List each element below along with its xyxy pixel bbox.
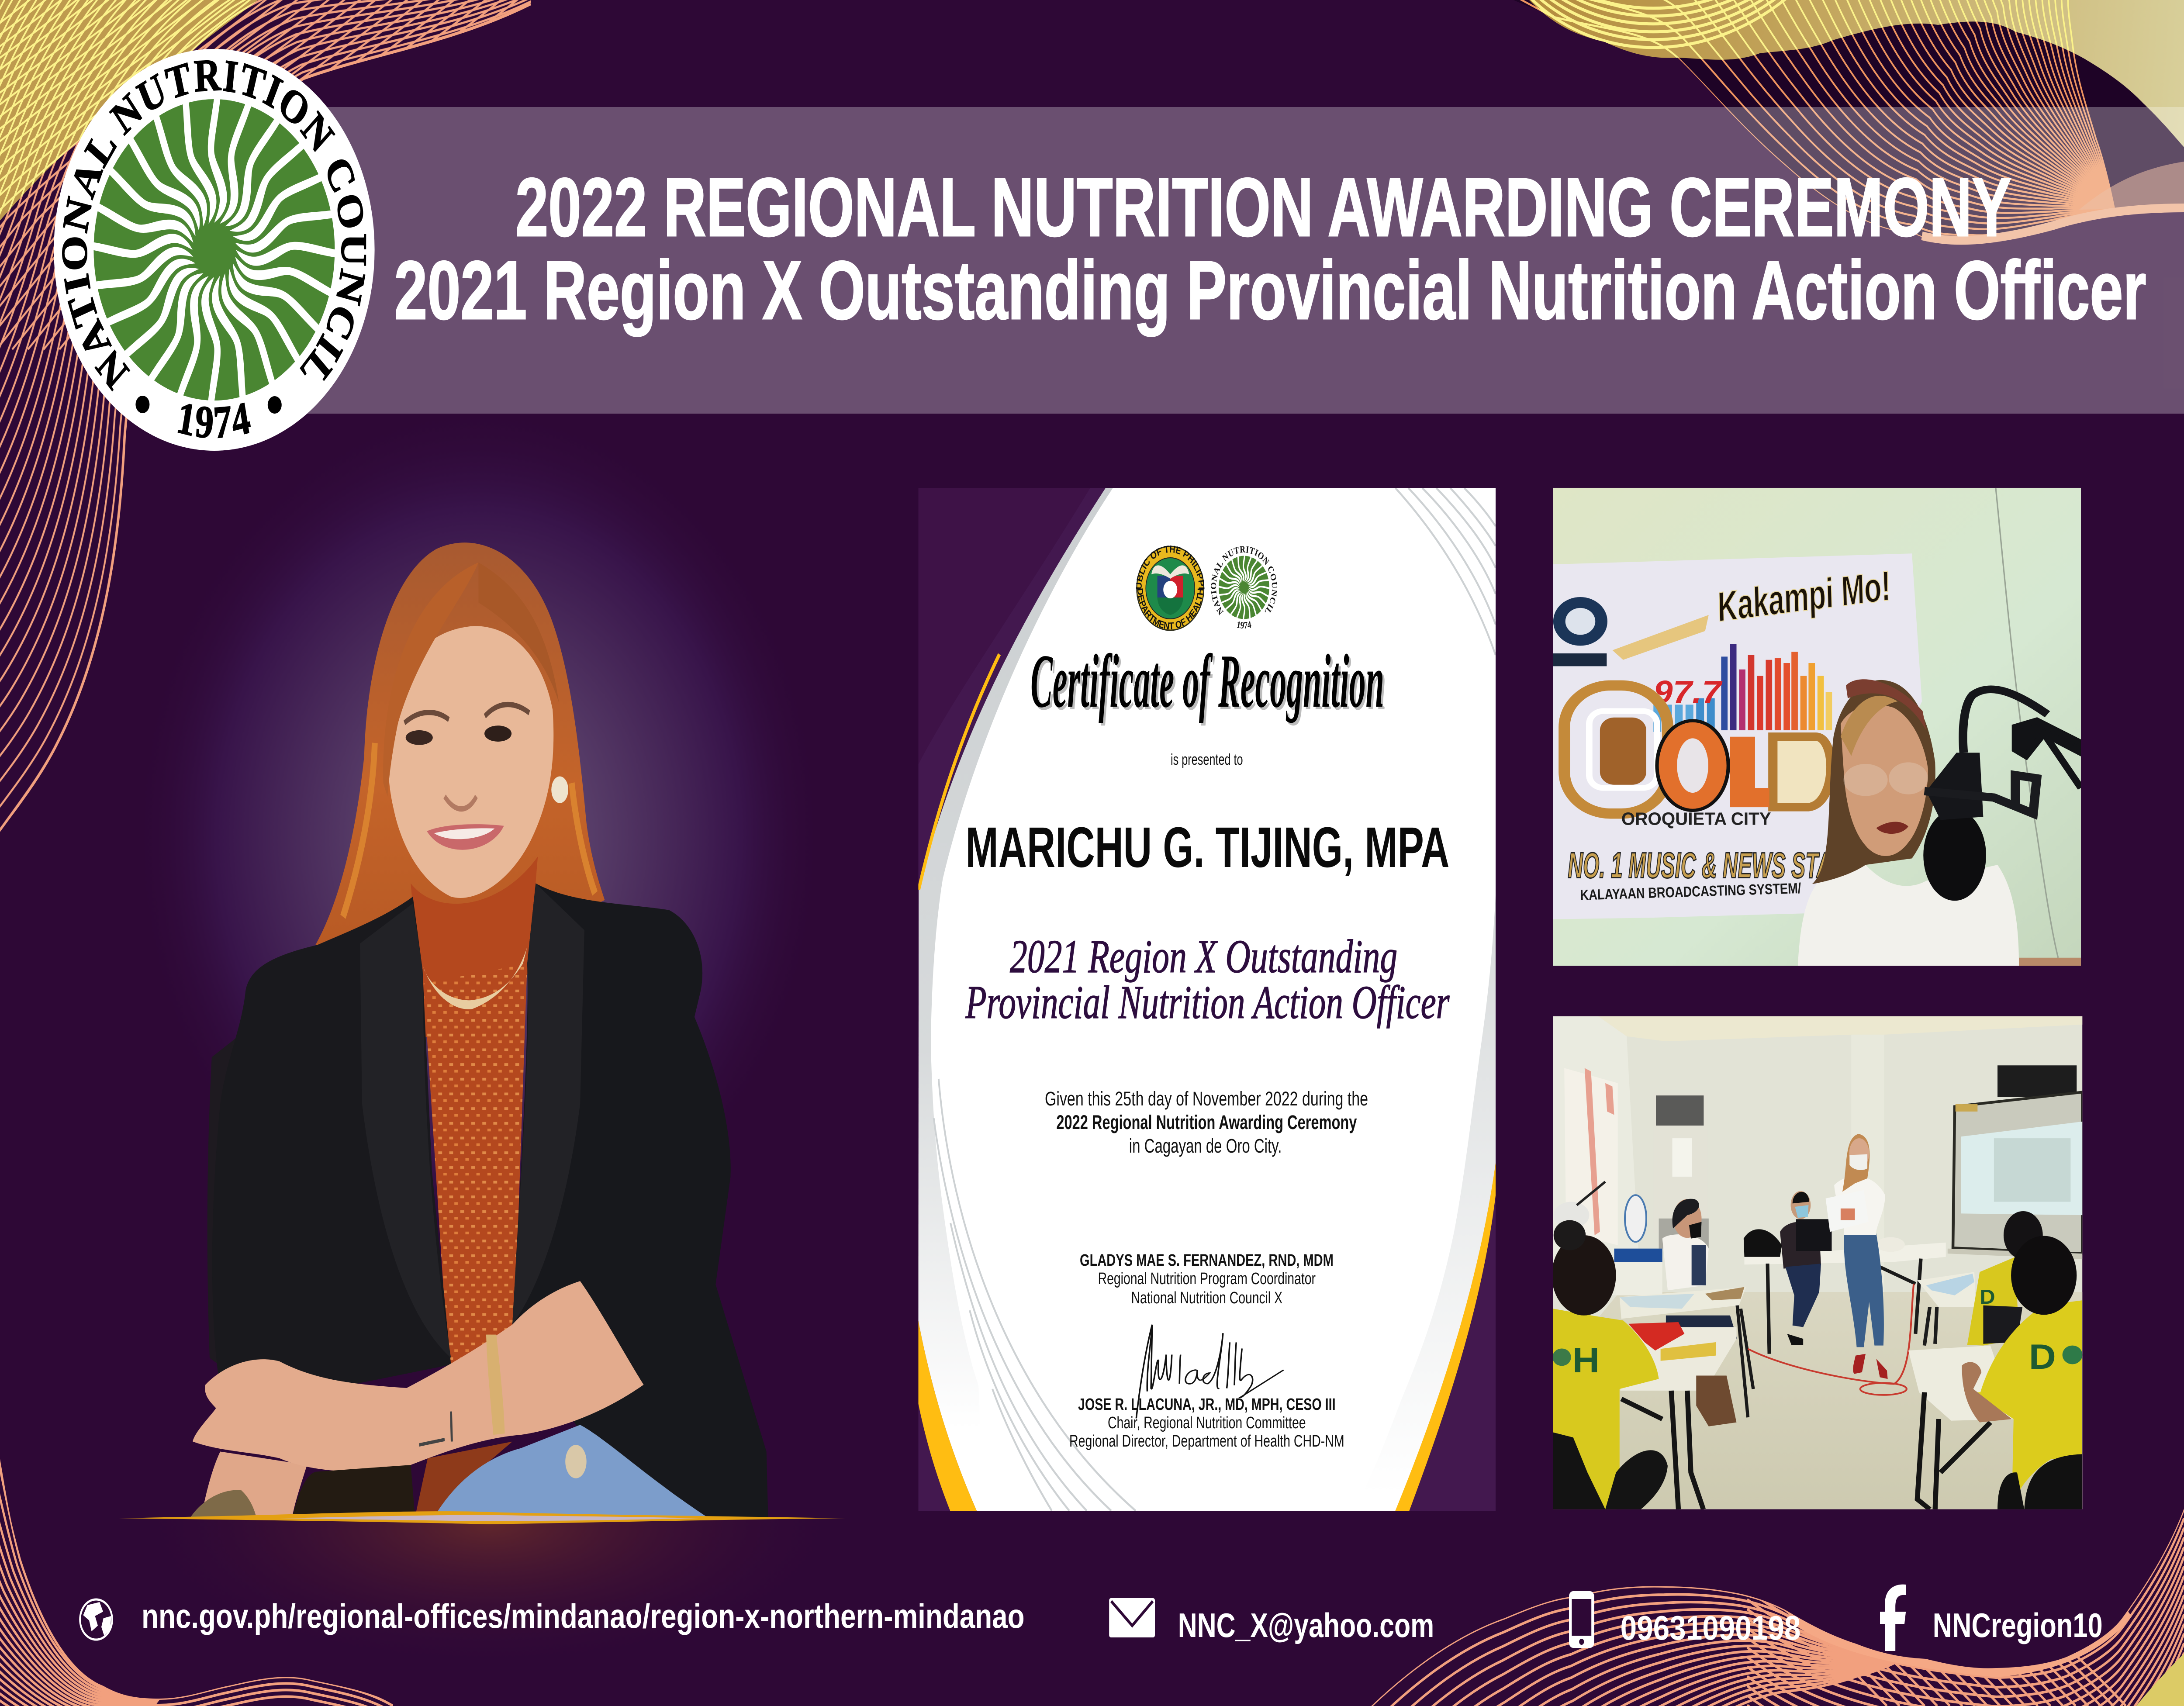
photo: radio studio interview: [1553, 488, 2081, 966]
certificate: first signatory: National Nutrition Council X: [1131, 1289, 1282, 1307]
certificate: first signatory: Regional Nutrition Program Coordinator: [1098, 1270, 1316, 1288]
photo: radio studio interview: KALAYAAN BROADCASTING SYSTEM/: [1580, 880, 1801, 903]
certificate: second signatory: [1069, 1395, 1344, 1450]
certificate: award title: Provincial Nutrition Action Officer: [965, 977, 1450, 1029]
certificate: [918, 488, 1496, 1511]
certificate: presented to: is presented to: [1171, 750, 1243, 768]
photo: classroom presentation: D: [1980, 1286, 1995, 1309]
photo: radio studio interview: NO. 1 MUSIC & NEWS STA: [1568, 846, 1832, 885]
icon: globe: [80, 1599, 112, 1640]
logo: National Nutrition Council: 1974: [173, 391, 255, 448]
certificate logo: National Nutrition Council: 1974: [1236, 619, 1252, 631]
icon: facebook: [1880, 1585, 1906, 1651]
photo: radio studio interview: 97.7: [1653, 674, 1723, 710]
photo: classroom presentation: D: [2029, 1337, 2056, 1377]
certificate heading: Certificate of Recognition: [1033, 642, 1386, 726]
wave: bottom left lines: [0, 1459, 393, 1706]
certificate: award title: [965, 931, 1450, 1029]
icon: phone: [1569, 1591, 1594, 1648]
logo: National Nutrition Council: NATIONAL NUTRITION COUNCIL: [54, 49, 375, 399]
title: 2022 REGIONAL NUTRITION AWARDING CEREMONY: [515, 161, 2011, 254]
photo: radio studio interview: OROQUIETA CITY: [1621, 809, 1771, 829]
certificate logo: Department of Health: REPUBLIC OF THE PHILIPPINES: [0, 0, 1206, 590]
portrait glow: [129, 415, 828, 1258]
certificate: second signatory: Regional Director, Department of Health CHD-NM: [1069, 1432, 1344, 1450]
wave: top left lines and gold: [0, 0, 531, 832]
certificate: second signatory: JOSE R. LLACUNA, JR., MD, MPH, CESO III: [1078, 1395, 1336, 1414]
certificate: first signatory: [1080, 1251, 1334, 1307]
footer: website: nnc.gov.ph/regional-offices/mindanao/region-x-northern-mindanao: [142, 1597, 1025, 1635]
footer: phone number: 09631090198: [1621, 1609, 1800, 1647]
footer: email: NNC_X@yahoo.com: [1178, 1606, 1434, 1644]
certificate logo: National Nutrition Council: NATIONAL NUTRITION COUNCIL: [1209, 544, 1279, 617]
photo: radio studio interview: Kakampi Mo!: [1714, 563, 1894, 630]
certificate heading: Certificate of Recognition: [1030, 639, 1384, 724]
title: [394, 161, 2146, 337]
certificate logo: Department of Health: DEPARTMENT OF HEALTH: [1135, 587, 1205, 632]
title banner: [280, 107, 2184, 414]
floor glow: [122, 1519, 856, 1685]
certificate: date text: [1045, 1088, 1368, 1157]
portrait: woman in black blazer: [190, 542, 768, 1517]
photo: classroom presentation: H: [1572, 1340, 1600, 1380]
wave: top right lines and gold: [1514, 0, 2184, 242]
certificate: date text: in Cagayan de Oro City.: [1129, 1135, 1282, 1157]
footer: facebook handle: NNCregion10: [1933, 1606, 2103, 1644]
certificate heading: [1030, 639, 1386, 726]
certificate: date text: Given this 25th day of November 2022 during the: [1045, 1088, 1368, 1110]
certificate: date text: 2022 Regional Nutrition Awarding Ceremony: [1056, 1111, 1357, 1133]
certificate: second signatory: Chair, Regional Nutrition Committee: [1108, 1414, 1306, 1432]
certificate: recipient name: MARICHU G. TIJING, MPA: [965, 816, 1449, 880]
certificate: signature: [1136, 1325, 1284, 1418]
certificate: award title: 2021 Region X Outstanding: [1010, 931, 1397, 983]
certificate: first signatory: GLADYS MAE S. FERNANDEZ, RND, MDM: [1080, 1251, 1334, 1270]
floor line: [119, 1511, 846, 1524]
photo: classroom presentation: [1552, 1016, 2082, 1509]
icon: envelope: [1109, 1598, 1155, 1637]
wave: bottom right lines: [1371, 1509, 2184, 1706]
